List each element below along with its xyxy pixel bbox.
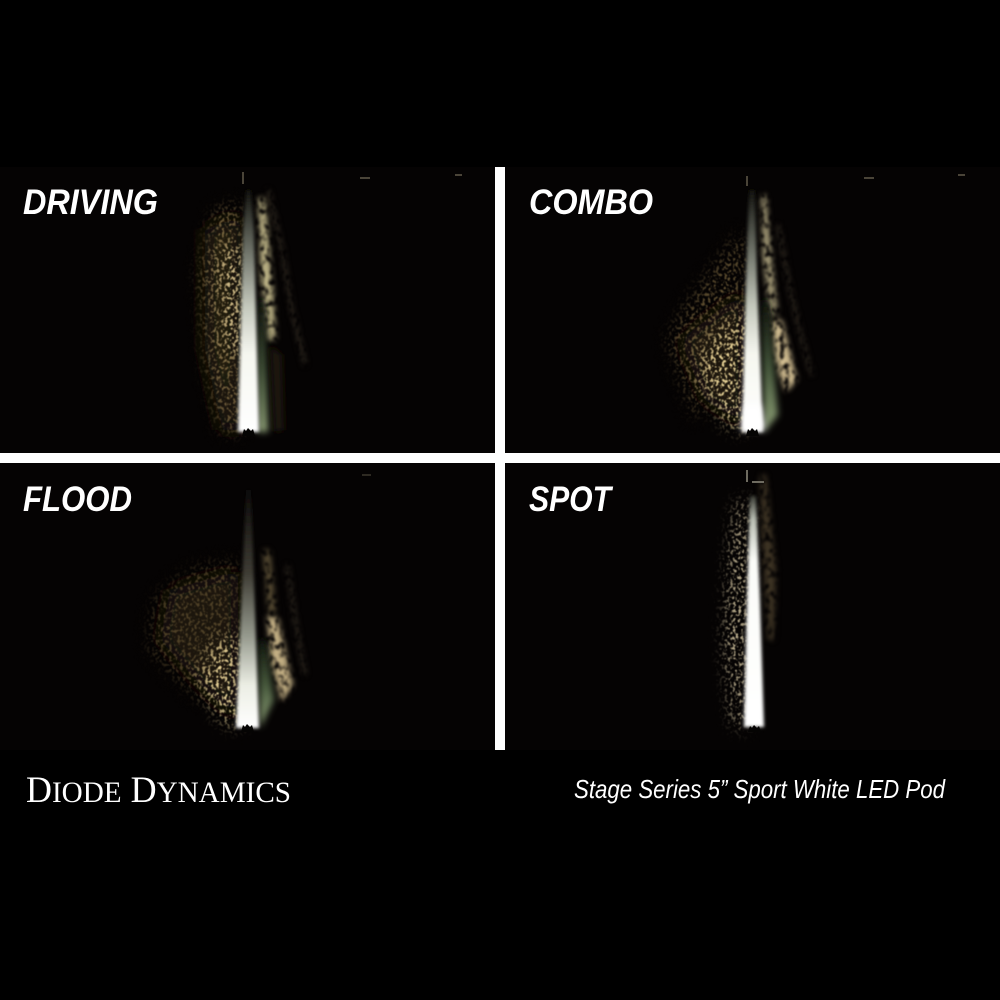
driving label: DRIVING xyxy=(23,183,158,222)
spot: right dim brush xyxy=(760,475,776,640)
flood: right brush patch xyxy=(267,615,293,702)
flood: green road edge xyxy=(258,640,274,728)
combo: green road edge xyxy=(762,300,778,432)
flood: dim upper brush xyxy=(263,550,276,612)
white divider: horizontal xyxy=(0,453,1000,463)
driving: vehicle silhouette xyxy=(242,428,255,436)
driving: left speckled foliage bright xyxy=(222,245,241,355)
spot: vehicle silhouette xyxy=(748,725,761,732)
combo: far fence line xyxy=(778,225,812,375)
driving: left speckled foliage dim xyxy=(200,204,241,432)
flood: distant light xyxy=(362,474,371,476)
combo: right roadside brush xyxy=(761,195,778,315)
driving: far fence line xyxy=(268,190,305,365)
combo: right brush patch xyxy=(771,320,797,392)
combo: ambient foliage glow xyxy=(681,298,745,420)
infographic canvas xyxy=(0,167,1000,804)
combo: distant lights xyxy=(746,174,965,186)
flood label: FLOOD xyxy=(23,480,132,519)
panel: driving xyxy=(24,172,462,442)
product caption: Stage Series 5” Sport White LED Pod xyxy=(574,774,946,804)
driving: dim brown verge xyxy=(270,345,284,432)
panel: flood xyxy=(24,474,371,739)
driving: ambient foliage glow xyxy=(205,215,240,430)
combo: light beam xyxy=(742,190,763,432)
combo: left speckled foliage bright xyxy=(700,310,746,432)
driving: right roadside brush xyxy=(258,198,276,340)
combo: left speckled foliage wide xyxy=(668,235,746,420)
spot: far markers xyxy=(746,470,764,483)
spot: light beam xyxy=(744,496,764,727)
flood: vehicle silhouette xyxy=(241,724,254,732)
driving: distant lights xyxy=(242,172,462,184)
white divider: vertical xyxy=(495,167,505,750)
flood: light beam xyxy=(236,490,259,728)
spot label: SPOT xyxy=(529,480,613,519)
panel: spot xyxy=(529,470,780,740)
flood: left speckled foliage bright xyxy=(198,630,240,728)
driving: light beam xyxy=(238,190,259,432)
spot: left speckled foliage xyxy=(726,500,748,730)
combo label: COMBO xyxy=(529,183,653,222)
combo: base glow xyxy=(741,405,765,430)
brand wordmark: DIODE DYNAMICS xyxy=(26,770,291,811)
driving: green road edge xyxy=(258,300,268,432)
flood: left speckled foliage wide xyxy=(150,560,238,700)
flood: ambient foliage glow xyxy=(160,570,238,720)
flood: far fence line xyxy=(287,565,305,675)
combo: vehicle silhouette xyxy=(746,428,759,436)
panel: combo xyxy=(530,174,965,444)
